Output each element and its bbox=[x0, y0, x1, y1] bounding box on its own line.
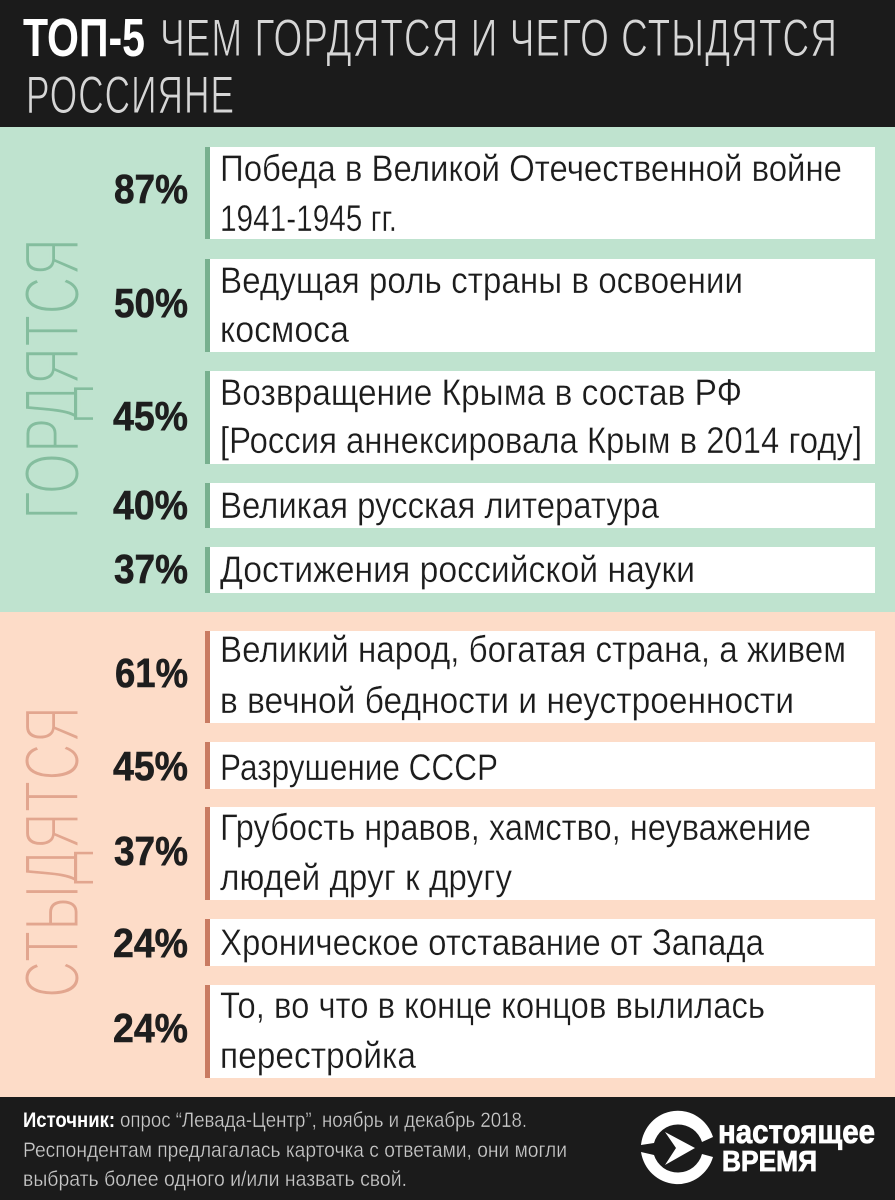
logo: Настоящее Время bbox=[641, 1111, 875, 1184]
header band bbox=[0, 0, 895, 127]
vertical heading: ashamed: СТЫДЯТСЯ bbox=[7, 706, 96, 998]
row: 24% bbox=[113, 985, 875, 1078]
row: 45%: Возвращение Крыма в состав РФ bbox=[220, 372, 742, 413]
row: 37% bbox=[114, 546, 875, 593]
row: 87% bbox=[114, 147, 875, 239]
row: 37%: Достижения российской науки bbox=[220, 549, 695, 590]
source note: опрос “Левада-Центр”, ноябрь и декабрь 2018. bbox=[120, 1109, 527, 1132]
row: 24%: 24% bbox=[113, 920, 188, 966]
row: 45%: 45% bbox=[113, 743, 188, 789]
row: 37% bbox=[114, 807, 875, 900]
row: 24%: Хроническое отставание от Запада bbox=[220, 922, 764, 963]
row: 37%: людей друг к другу bbox=[220, 857, 512, 898]
row: 45%: 45% bbox=[113, 393, 188, 439]
title bbox=[23, 8, 838, 125]
vertical heading: proud: ГОРДЯТСЯ bbox=[7, 238, 96, 520]
source note: выбрать более одного и/или назвать свой. bbox=[23, 1168, 407, 1191]
row: 24%: 24% bbox=[113, 1005, 188, 1051]
row: 24%: перестройка bbox=[220, 1035, 416, 1076]
row: 45%: Разрушение СССР bbox=[220, 747, 498, 788]
row: 37%: 37% bbox=[114, 546, 188, 592]
row: 40% bbox=[113, 482, 875, 528]
footer band bbox=[0, 1097, 895, 1200]
source note: Источник: bbox=[23, 1109, 115, 1132]
row: 45% bbox=[113, 742, 875, 789]
row: 61%: 61% bbox=[115, 650, 188, 696]
source note bbox=[23, 1109, 567, 1191]
row: 50%: космоса bbox=[220, 309, 349, 350]
row: 40%: 40% bbox=[113, 482, 188, 528]
title: РОССИЯНЕ bbox=[26, 66, 235, 125]
row: 87%: 1941-1945 гг. bbox=[220, 198, 397, 239]
row: 24% bbox=[113, 919, 875, 966]
row: 50% bbox=[114, 259, 875, 352]
row: 87%: 87% bbox=[114, 166, 188, 212]
row: 24%: То, во что в конце концов вылилась bbox=[220, 985, 765, 1026]
row: 37%: Грубость нравов, хамство, неуважение bbox=[220, 807, 811, 848]
row: 37%: 37% bbox=[114, 828, 188, 874]
title: ТОП-5 bbox=[23, 8, 145, 68]
logo: Настоящее Время: ВРЕМЯ bbox=[722, 1146, 817, 1178]
panel: ashamed bbox=[0, 612, 895, 1097]
logo: Настоящее Время: настоящее bbox=[718, 1113, 875, 1150]
row: 45% bbox=[113, 371, 875, 464]
row: 61%: в вечной бедности и неустроенности bbox=[220, 680, 794, 721]
row: 40%: Великая русская литература bbox=[220, 485, 659, 526]
row: 50%: 50% bbox=[114, 280, 188, 326]
row: 50%: Ведущая роль страны в освоении bbox=[220, 260, 743, 301]
panel: proud bbox=[0, 127, 895, 612]
source note: Респондентам предлагалась карточка с ответами, они могли bbox=[23, 1139, 567, 1162]
row: 61% bbox=[115, 629, 875, 723]
